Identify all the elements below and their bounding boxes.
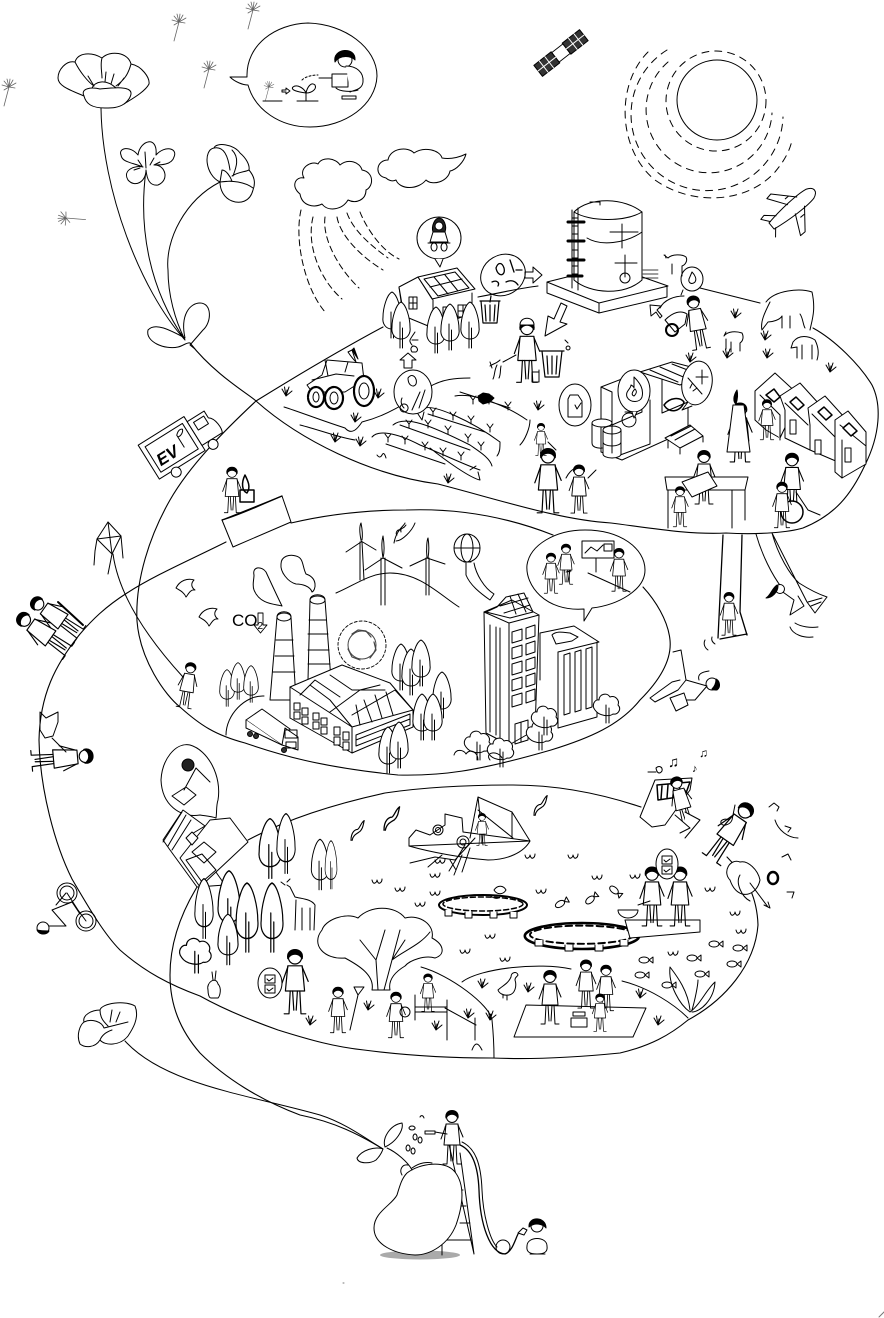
gardener and water spray	[406, 1110, 463, 1164]
icons: forest trees	[180, 814, 337, 973]
callout: food waste bubble and bin	[473, 246, 533, 323]
icon: desk with person	[222, 467, 291, 547]
seedling sequence	[263, 75, 318, 101]
icons: music notes: ♫	[699, 746, 708, 760]
label: CO2 down	[232, 611, 267, 633]
callout: person bubble	[417, 217, 461, 267]
illustration: mango and gardener	[357, 1110, 547, 1260]
icon: picnic blanket and family	[514, 960, 646, 1037]
icons: music notes	[668, 746, 798, 898]
icons: birds	[176, 579, 218, 626]
icon: office building	[454, 593, 620, 767]
icon: fishing boat	[409, 797, 530, 875]
icon: wind turbines on hill	[336, 523, 459, 607]
dandelion seeds	[2, 2, 260, 226]
icon: satellite	[534, 30, 588, 76]
hose	[460, 1142, 527, 1254]
icon: trash bin	[540, 340, 570, 377]
children playing	[329, 974, 482, 1050]
icon: rabbit	[208, 971, 220, 998]
field rows with seedlings	[372, 392, 530, 480]
icon: factory	[290, 665, 413, 753]
icon: people walking at left	[11, 590, 94, 774]
icon: recycling dashed circle	[338, 621, 386, 669]
ladder	[442, 1127, 474, 1255]
icon: falling person	[650, 650, 720, 711]
icon: fish pens	[439, 884, 639, 951]
icon: EV truck: EV	[153, 441, 184, 470]
icon: tractor	[307, 348, 374, 409]
gardener watering	[319, 50, 363, 99]
icon: EV truck	[138, 403, 231, 486]
guitarist	[727, 861, 778, 908]
field furrow lines	[284, 378, 470, 458]
icon: house with solar roof	[383, 268, 479, 353]
mango body	[374, 1164, 462, 1255]
icon: house	[163, 810, 248, 887]
seated child	[527, 1219, 547, 1254]
icon: clouds and dashed rain	[295, 149, 466, 313]
icon: deer	[281, 879, 315, 930]
icon: sun with dashed rays	[625, 50, 792, 198]
icon: recycling bins	[755, 373, 866, 478]
icon: three flowers on stems	[58, 53, 254, 349]
arrow: to house	[400, 353, 416, 368]
person: farmer with bucket	[490, 318, 540, 382]
icon: airplane	[752, 171, 831, 248]
tufts of meadow grass	[306, 979, 664, 1030]
icons: pig, sheep, cow and rider	[660, 255, 818, 360]
callout: vegetables bubble	[394, 370, 432, 420]
icons: trees around factory	[220, 640, 451, 773]
icons: tufts of grass	[282, 309, 836, 483]
person with checklist	[258, 950, 308, 1014]
icon: seaweed	[670, 967, 715, 1012]
leaves	[357, 1123, 432, 1175]
pianist on bench	[665, 774, 700, 838]
inner meadow arcs	[421, 966, 688, 1058]
callout: watering seedling speech bubble	[230, 23, 377, 127]
icons: small fish	[635, 941, 747, 988]
callout: laptop person bubble	[161, 745, 219, 818]
tiny marks	[343, 1283, 884, 1317]
icon: swings	[704, 533, 827, 650]
callout: fuel jug, flame and fish bone bubbles	[559, 359, 716, 426]
top land outline	[39, 286, 878, 1149]
icons: music notes: ♫	[668, 754, 679, 771]
flower on stem near bottom	[78, 1003, 383, 1149]
saxophonist	[700, 797, 761, 867]
panel: nature, fisheries and recreation	[161, 745, 747, 1058]
icon: biogas tank	[547, 201, 668, 313]
icon: musicians	[640, 767, 778, 908]
icon: smoke clouds	[253, 555, 315, 606]
icon: smokestacks	[270, 595, 331, 700]
piano	[640, 767, 692, 827]
icons: water waves	[372, 854, 746, 961]
arrow: from farm back to tank	[650, 305, 662, 318]
panel: farm and circular resources	[282, 201, 866, 528]
icon: kitchen stall	[592, 362, 710, 460]
icon: truck	[226, 696, 298, 752]
label: CO2 down: CO	[232, 611, 258, 630]
callout: meeting bubble	[527, 530, 645, 621]
arrow: to digester	[525, 267, 542, 283]
icon: big tree	[318, 908, 442, 990]
icon: cyclist	[37, 883, 96, 934]
group of people: family, woman, children, table, wheelchair	[534, 390, 820, 528]
icon: gulls	[351, 796, 547, 840]
arrow: compost down	[545, 303, 567, 336]
label: CO2 down: 2	[258, 621, 264, 632]
people on dock	[618, 849, 700, 938]
icon: kite and string	[94, 522, 201, 709]
icons: music notes: ♪	[692, 763, 698, 775]
panel: industry, energy and city	[176, 523, 645, 773]
icon: goose	[498, 973, 518, 1000]
icon: balloon with ribbon	[454, 534, 494, 600]
